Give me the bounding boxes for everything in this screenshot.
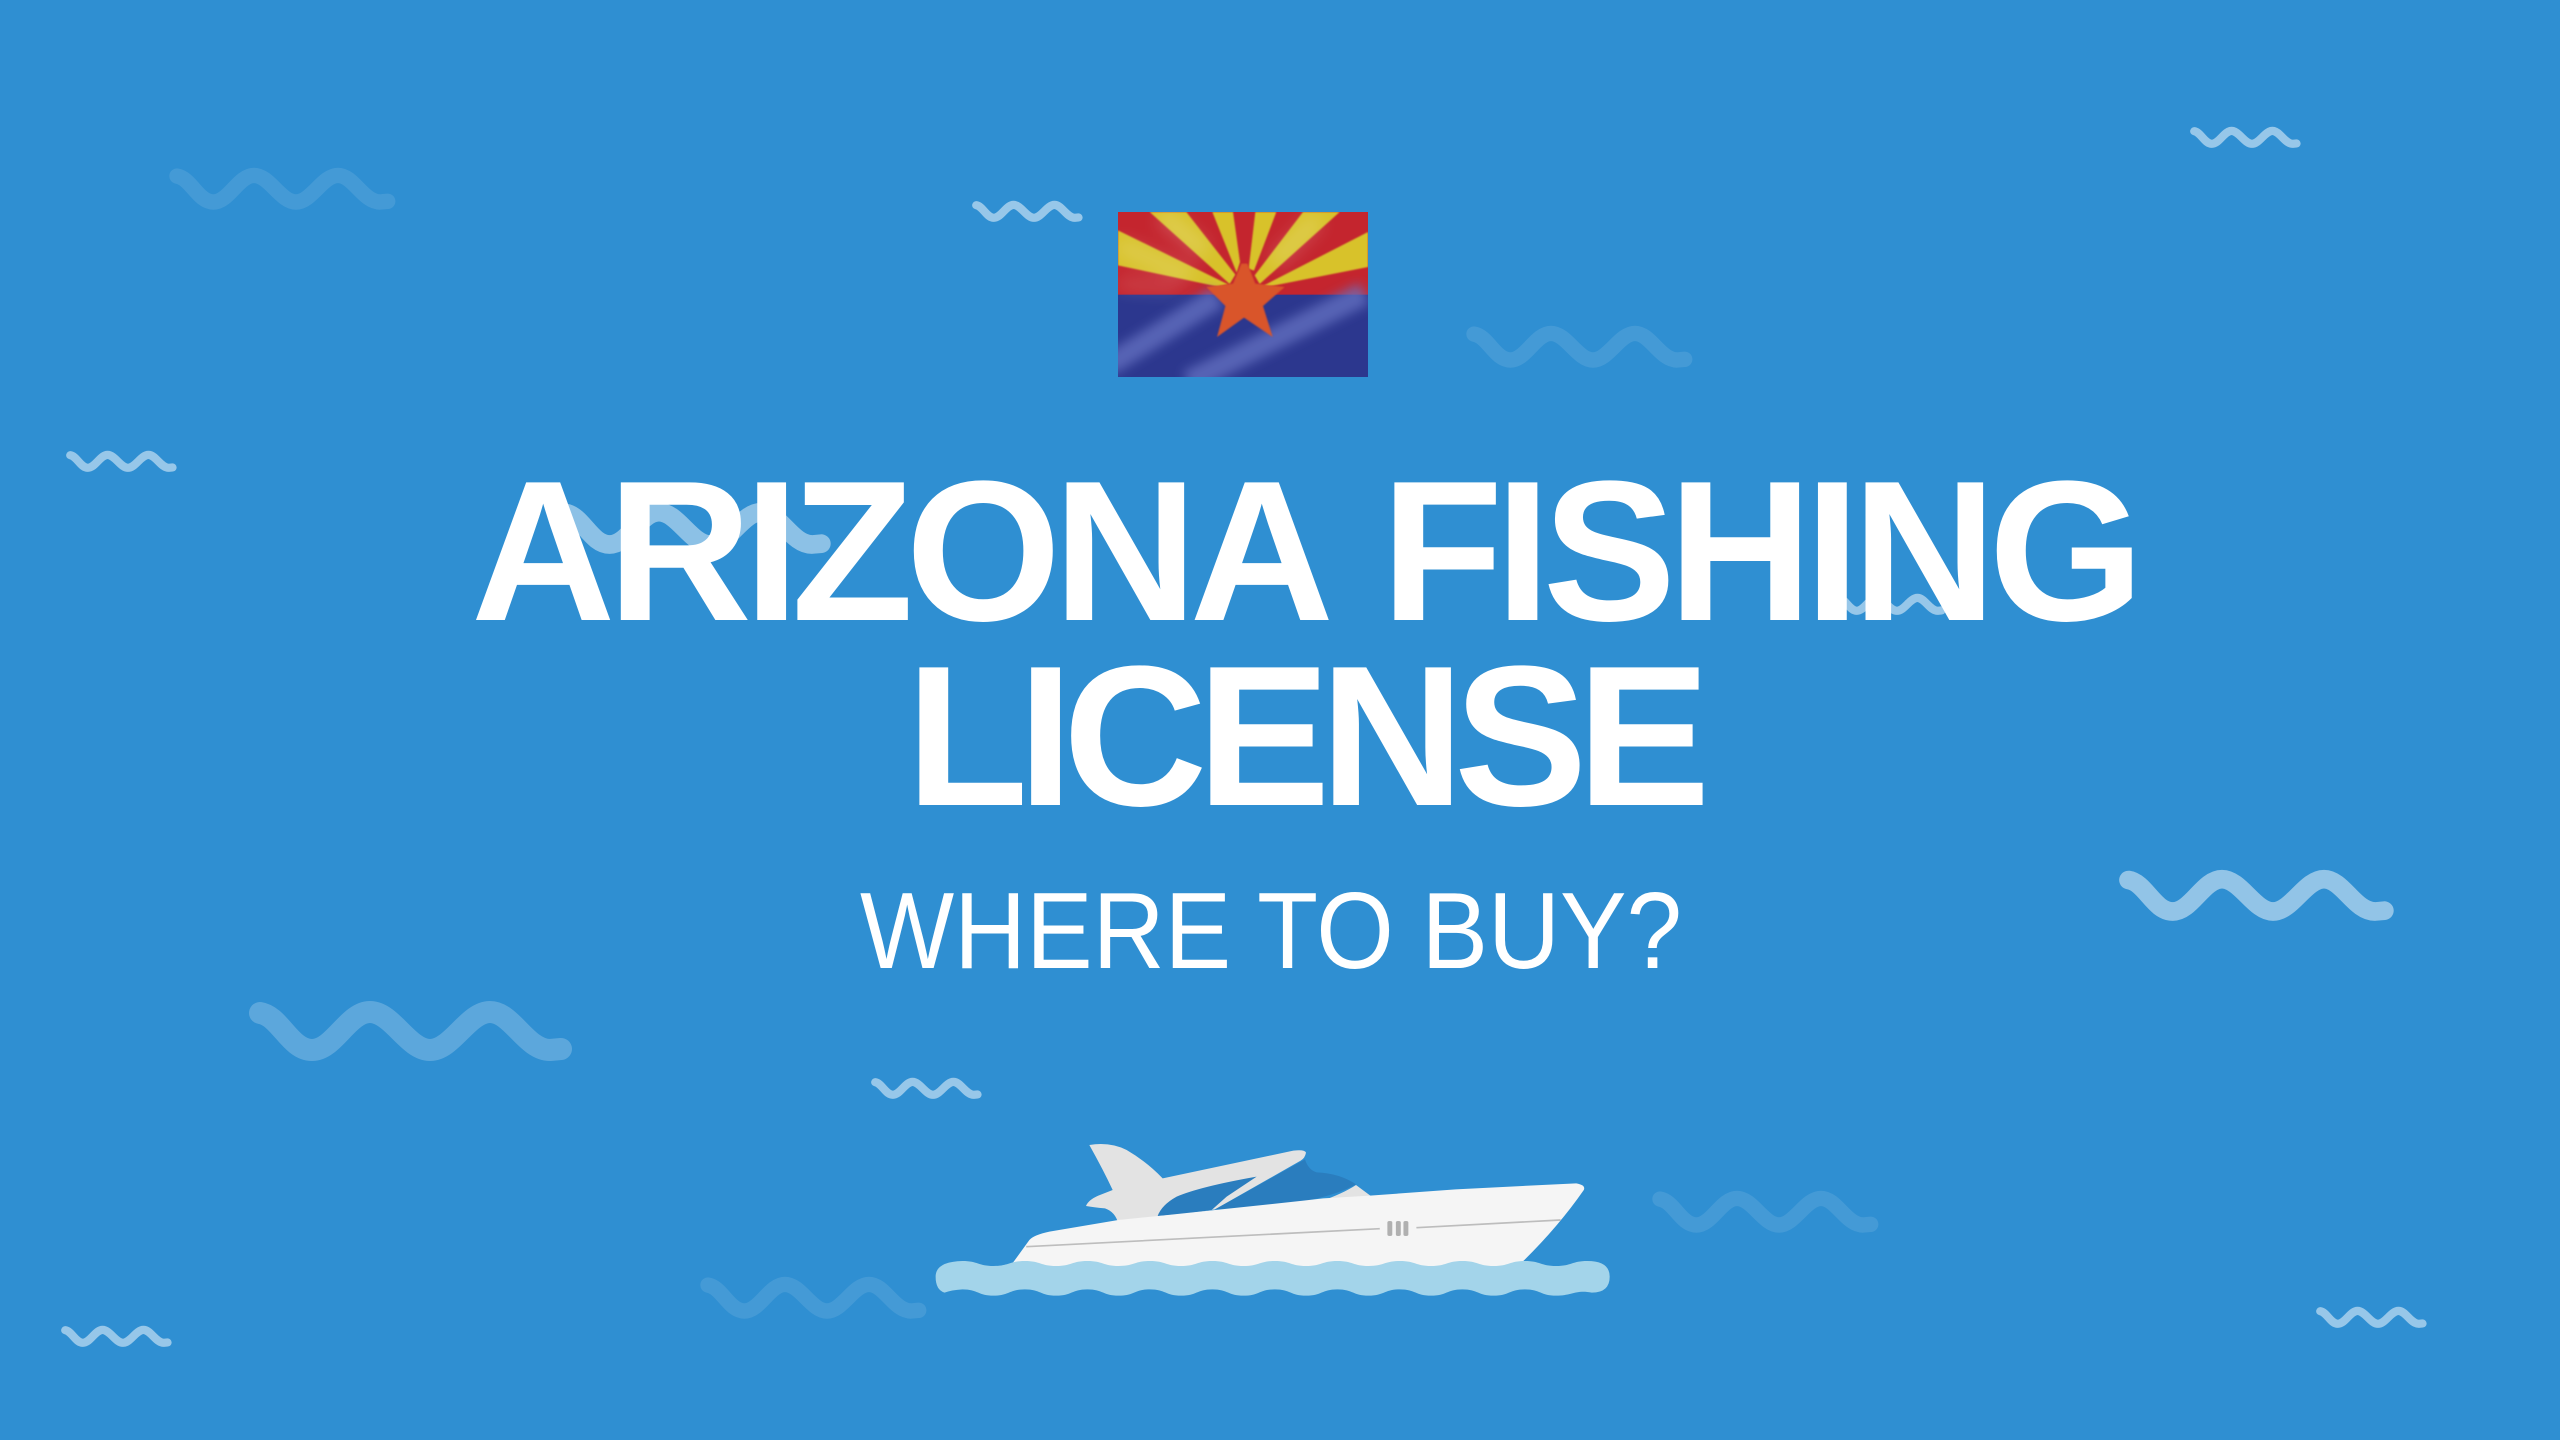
- flag star: [1206, 264, 1285, 337]
- wave: behind title right: [1839, 598, 1942, 611]
- flag red field: [1118, 212, 1368, 295]
- title line 2: LICENSE: [906, 625, 1703, 848]
- wave: right of flag: [1474, 333, 1685, 360]
- wave: behind title left: [566, 512, 821, 544]
- icon: Arizona flag: [1108, 212, 1368, 382]
- flag fabric sheen: [1108, 294, 1365, 382]
- boat side window: [1158, 1177, 1257, 1216]
- subtitle: WHERE TO BUY?: [860, 870, 1682, 992]
- boat windshield: [1215, 1159, 1356, 1209]
- title line 1: ARIZONA: [471, 440, 1330, 663]
- icon: boat on water: [936, 1144, 1610, 1296]
- wave: small bottom left: [65, 1330, 168, 1343]
- water: [936, 1261, 1610, 1296]
- wave: top left: [177, 175, 388, 202]
- boat body and water: [936, 1183, 1610, 1296]
- wave: small left: [70, 455, 173, 468]
- title line 1: FISHING: [1381, 440, 2136, 663]
- flag yellow rays: [1118, 212, 1368, 287]
- wave: small top right: [2194, 131, 2297, 144]
- wave: left lower: [260, 1012, 561, 1050]
- wave: left of boat: [708, 1284, 919, 1311]
- boat cabin: [1086, 1144, 1372, 1223]
- wave: small near flag: [976, 205, 1079, 218]
- wave: right middle: [2128, 879, 2384, 912]
- wave: small above boat: [875, 1082, 978, 1095]
- title: [471, 440, 2136, 848]
- decorative waves: [65, 131, 2423, 1343]
- boat hull: [1012, 1183, 1584, 1268]
- infographic canvas: [61, 126, 2427, 1347]
- boat rear deck strip: [1320, 1185, 1372, 1202]
- wave: right of boat: [1660, 1198, 1871, 1225]
- boat superstructure: [1086, 1144, 1306, 1223]
- boat vents: [1387, 1221, 1408, 1236]
- flag blue field: [1118, 295, 1368, 377]
- wave: small bottom right: [2320, 1311, 2423, 1324]
- flag highlights: [1118, 215, 1318, 287]
- boat stripe: [1026, 1220, 1561, 1247]
